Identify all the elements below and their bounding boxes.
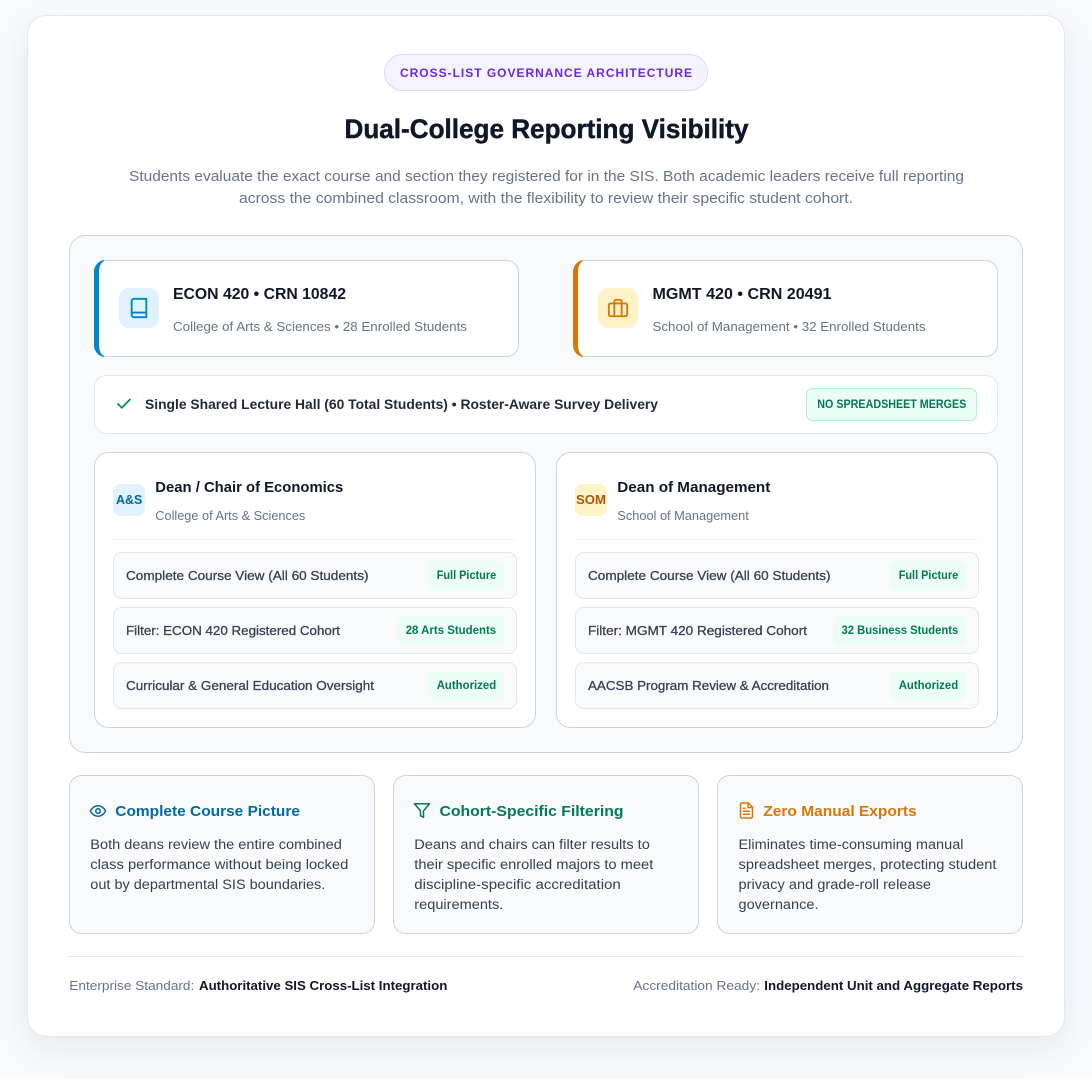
benefit text: governance. (738, 897, 818, 912)
footer left (69, 978, 447, 993)
badge (384, 54, 708, 90)
pill: no spreadsheet merges: NO SPREADSHEET MERGES (817, 399, 967, 411)
row: econ filter: Filter: ECON 420 Registered Cohort (126, 623, 340, 638)
benefit text: requirements. (414, 897, 503, 912)
panel: architecture (70, 236, 1022, 752)
dean card: economics (94, 452, 536, 728)
avatar: A&S (113, 484, 145, 516)
title: Dual-College Reporting Visibility (344, 114, 748, 144)
footer right: Independent Unit and Aggregate Reports (764, 978, 1023, 993)
row: complete course view: Complete Course View (All 60 Students) (588, 568, 830, 583)
avatar: SOM (575, 484, 607, 516)
pill: no spreadsheet merges (806, 388, 976, 420)
benefit title: Cohort-Specific Filtering (440, 803, 624, 820)
row: complete course view: Full Picture (437, 570, 496, 582)
benefit title: Complete Course Picture (115, 803, 300, 820)
row: complete course view (576, 552, 978, 598)
row: econ filter (114, 608, 516, 654)
badge: CROSS-LIST GOVERNANCE ARCHITECTURE (400, 66, 692, 80)
shared text: Single Shared Lecture Hall (60 Total Students) • Roster-Aware Survey Delivery (145, 397, 658, 412)
footer left: Enterprise Standard: (69, 978, 194, 993)
row: econ filter: 28 Arts Students (406, 625, 496, 637)
avatar: SOM: SOM (576, 492, 606, 507)
avatar: A&S: A&S (116, 492, 143, 507)
benefit text: Eliminates time-consuming manual (738, 837, 964, 852)
benefit text: spreadsheet merges, protecting student (738, 857, 997, 872)
row: complete course view (114, 552, 516, 598)
row: aacsb review: AACSB Program Review & Accreditation (588, 678, 829, 693)
row: mgmt filter: 32 Business Students (842, 625, 958, 637)
dean card: management (556, 452, 998, 728)
row: complete course view: Complete Course View (All 60 Students) (126, 568, 368, 583)
course card: ECON 420 (94, 260, 518, 357)
benefit text: class performance without being locked (90, 857, 348, 872)
footer right: Accreditation Ready: (633, 978, 760, 993)
course detail: College of Arts & Sciences • 28 Enrolled Students (173, 319, 467, 334)
benefit: cohort-specific filtering (394, 776, 698, 934)
icon: funnel (414, 804, 430, 817)
row: mgmt filter: Filter: MGMT 420 Registered Cohort (588, 623, 807, 638)
benefit text (90, 837, 348, 892)
benefit: zero manual exports (718, 776, 1022, 934)
course detail: School of Management • 32 Enrolled Students (652, 319, 926, 334)
dean college: School of Management (617, 509, 749, 523)
icon: check (118, 400, 130, 408)
icon: eye (90, 806, 106, 816)
benefit text: privacy and grade-roll release (738, 877, 931, 892)
row: aacsb review: Authorized (899, 680, 958, 692)
course title: ECON 420 • CRN 10842 (173, 286, 346, 303)
row: curricular oversight: Curricular & General Education Oversight (126, 678, 374, 693)
benefit title: Zero Manual Exports (763, 803, 917, 820)
benefit text: out by departmental SIS boundaries. (90, 877, 325, 892)
row: mgmt filter (576, 608, 978, 654)
benefit text (414, 837, 654, 912)
dean college: College of Arts & Sciences (155, 509, 305, 523)
subtitle (129, 168, 964, 207)
icon: document (740, 803, 752, 818)
course title: MGMT 420 • CRN 20491 (652, 286, 832, 303)
header (129, 54, 964, 207)
row: complete course view: Full Picture (899, 570, 958, 582)
footer (69, 978, 1023, 993)
subtitle: across the combined classroom, with the flexibility to review their specific student cohort. (239, 190, 853, 207)
benefit text: their specific enrolled majors to meet (414, 857, 654, 872)
row: curricular oversight: Authorized (437, 680, 496, 692)
dean name: Dean of Management (617, 479, 770, 496)
footer left: Authoritative SIS Cross-List Integration (199, 978, 447, 993)
benefit text: discipline-specific accreditation (414, 877, 621, 892)
shared lecture hall bar (94, 376, 998, 434)
row: curricular oversight (114, 662, 516, 708)
benefit text: Deans and chairs can filter results to (414, 837, 650, 852)
benefit text: Both deans review the entire combined (90, 837, 342, 852)
benefit: complete course picture (70, 776, 374, 934)
icon: briefcase (598, 288, 638, 328)
icon: book (119, 288, 159, 328)
subtitle: Students evaluate the exact course and section they registered for in the SIS. Both academic leaders receive full reporting (129, 168, 964, 185)
row: aacsb review (576, 662, 978, 708)
benefit text (738, 837, 997, 912)
footer right (633, 978, 1023, 993)
course card: MGMT 420 (573, 260, 998, 357)
dean name: Dean / Chair of Economics (155, 479, 343, 496)
